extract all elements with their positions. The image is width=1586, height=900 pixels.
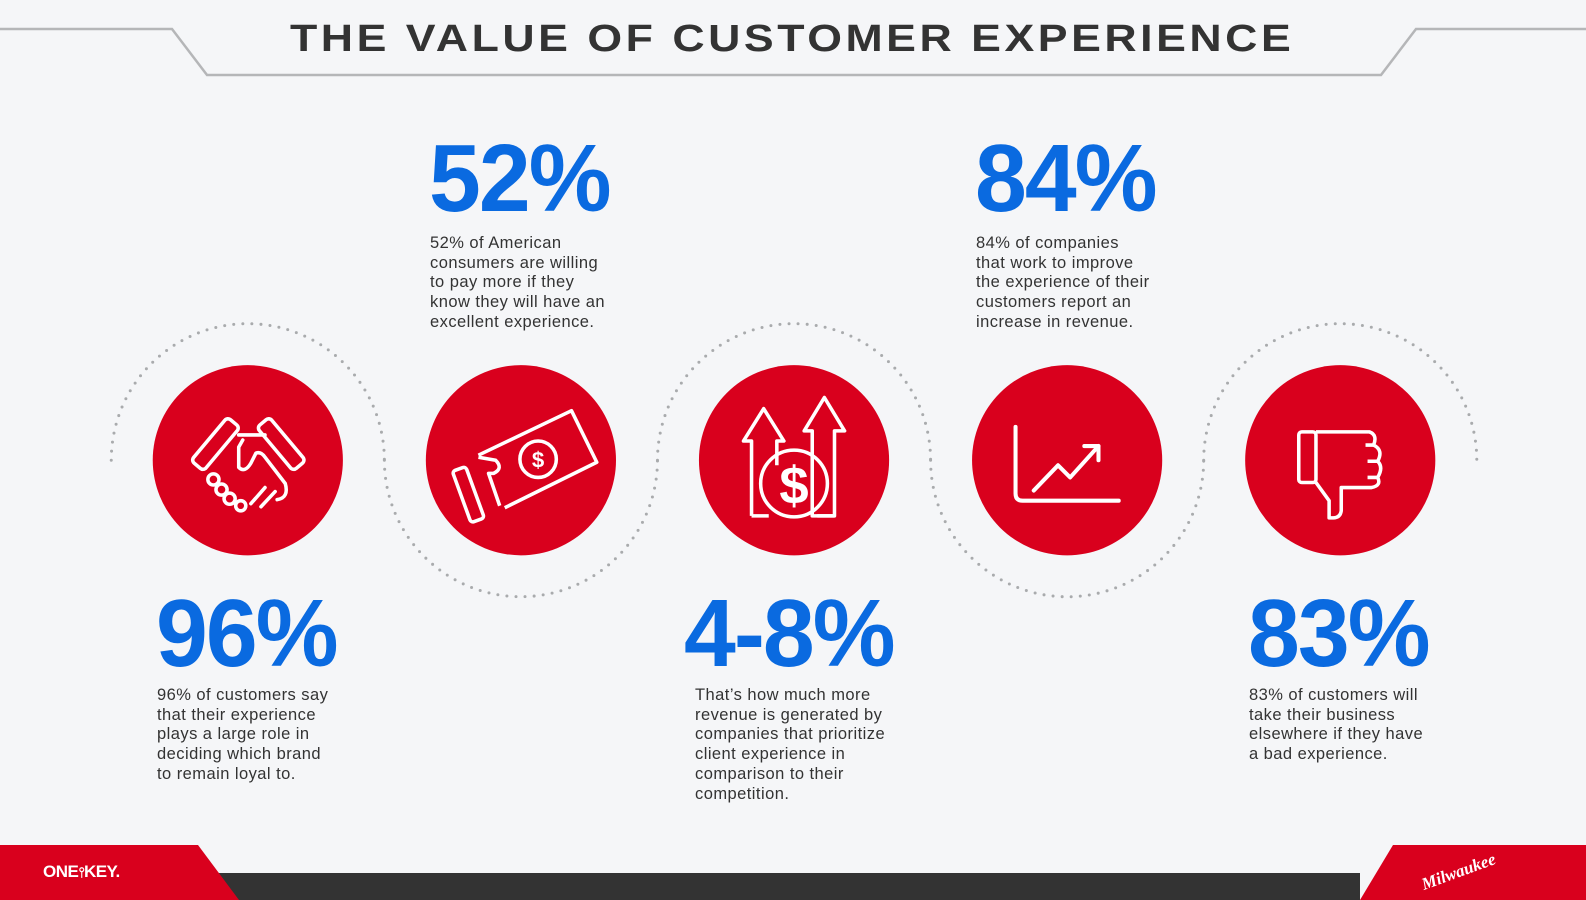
icon circle: thumbs down <box>1245 365 1435 555</box>
text 83%: elsewhere if they have <box>1249 725 1423 743</box>
icon circle: money in hand <box>426 365 616 555</box>
logo: one key: ONE⫯KEY. <box>43 862 120 881</box>
text 96%: that their experience <box>157 706 316 724</box>
text 96%: to remain loyal to. <box>157 765 296 783</box>
text 52%: to pay more if they <box>430 273 574 291</box>
icon circle: growth chart <box>972 365 1162 555</box>
text 96%: plays a large role in <box>157 725 310 743</box>
text 4-8%: revenue is generated by <box>695 706 882 724</box>
dotted arcs <box>111 324 1477 597</box>
stat 84%: 84% <box>975 125 1156 232</box>
text 52% <box>430 234 605 331</box>
text 96%: deciding which brand <box>157 745 321 763</box>
text 84%: the experience of their <box>976 273 1150 291</box>
text 52%: know they will have an <box>430 293 605 311</box>
icon circle: dollar with arrows: $ <box>779 457 809 516</box>
title: THE VALUE OF CUSTOMER EXPERIENCE <box>290 18 1294 60</box>
icon circle: dollar with arrows <box>699 365 889 555</box>
text 96%: 96% of customers say <box>157 686 328 704</box>
text 4-8%: client experience in <box>695 745 845 763</box>
text 52%: excellent experience. <box>430 313 594 331</box>
icon circle: money in hand: $ <box>532 447 545 472</box>
stat 96%: 96% <box>156 580 337 687</box>
icons and arcs <box>111 324 1477 597</box>
text 4-8%: competition. <box>695 785 789 803</box>
text 4-8%: comparison to their <box>695 765 844 783</box>
text 84%: 84% of companies <box>976 234 1119 252</box>
header frame <box>0 29 1586 75</box>
text 84%: customers report an <box>976 293 1131 311</box>
text 83%: 83% of customers will <box>1249 686 1418 704</box>
text 84% <box>976 234 1150 331</box>
text 52%: consumers are willing <box>430 254 598 272</box>
text 83%: take their business <box>1249 706 1395 724</box>
text 84%: that work to improve <box>976 254 1134 272</box>
footer <box>0 845 1586 900</box>
stat 83%: 83% <box>1248 580 1429 687</box>
text 83% <box>1249 686 1423 763</box>
stat 4-8%: 4-8% <box>684 580 894 687</box>
logo: milwaukee: Milwaukee <box>1419 849 1498 894</box>
text 4-8% <box>695 686 885 803</box>
text 4-8%: companies that prioritize <box>695 725 885 743</box>
text 4-8%: That’s how much more <box>695 686 871 704</box>
text 83%: a bad experience. <box>1249 745 1388 763</box>
text 52%: 52% of American <box>430 234 561 252</box>
icon circle: handshake <box>153 365 343 555</box>
stat 52%: 52% <box>429 125 610 232</box>
text 96% <box>157 686 328 783</box>
text 84%: increase in revenue. <box>976 313 1134 331</box>
